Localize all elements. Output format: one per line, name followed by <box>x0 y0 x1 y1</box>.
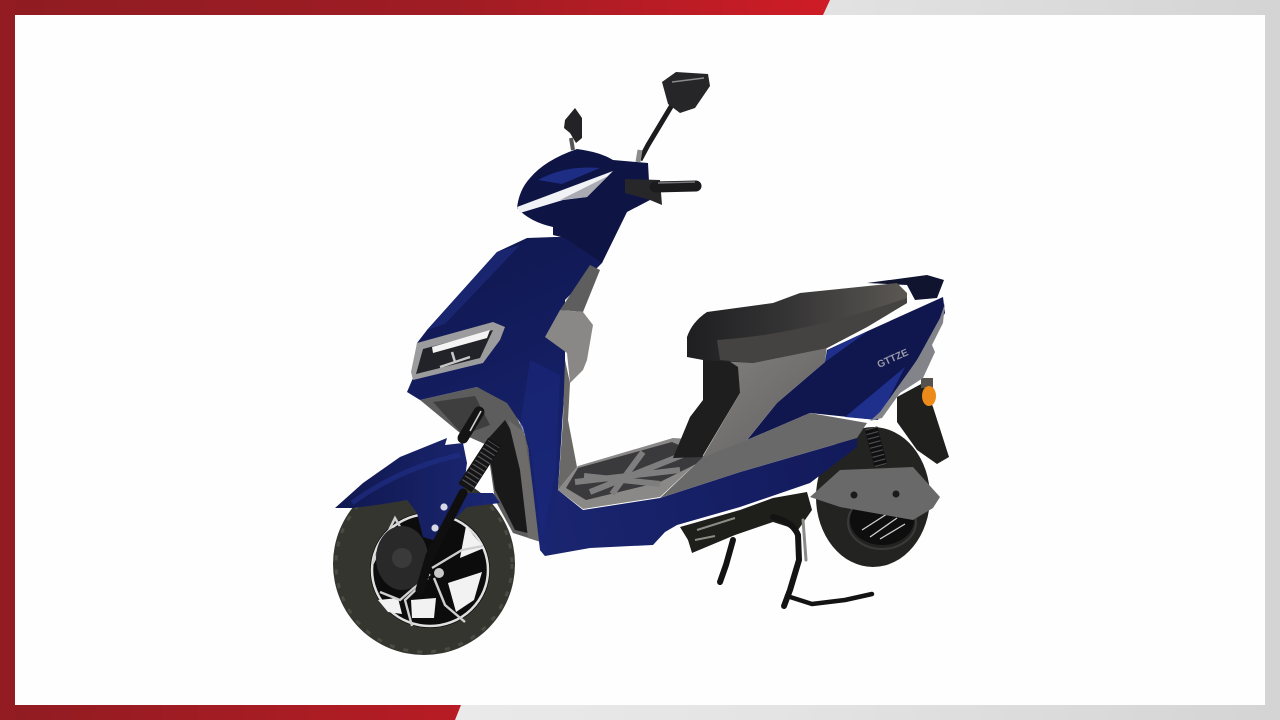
grab rail <box>867 275 944 300</box>
handlebar grip <box>625 179 696 205</box>
wheel rim <box>370 512 490 628</box>
rear blue side panel <box>747 297 945 440</box>
handlebar cowl <box>517 149 650 263</box>
front fork and spring <box>420 411 495 590</box>
front fender <box>335 438 500 540</box>
front leg shield <box>407 237 612 556</box>
scooter illustration <box>333 72 949 655</box>
rear shock absorber <box>871 428 881 466</box>
main headlight <box>411 322 505 380</box>
muffler <box>810 467 940 520</box>
rear silver trim <box>870 303 945 421</box>
rear mudguard <box>897 383 949 464</box>
motor frame <box>680 492 812 553</box>
brand badge: GTTZE <box>876 347 910 371</box>
front wheel <box>333 473 515 655</box>
floorboard <box>558 438 708 509</box>
right mirror <box>638 72 710 162</box>
rear wheel <box>816 427 930 567</box>
turn indicator <box>921 378 936 406</box>
left mirror <box>564 108 582 150</box>
grey under-seat panel <box>702 345 827 458</box>
grey inner shield panels <box>545 265 600 490</box>
centre and side stand <box>720 517 872 606</box>
dark under-seat body <box>673 355 740 458</box>
lower blue body <box>540 438 857 556</box>
front inner grey panel <box>420 387 541 542</box>
seat <box>687 283 907 363</box>
lower grey side panel <box>660 413 867 498</box>
